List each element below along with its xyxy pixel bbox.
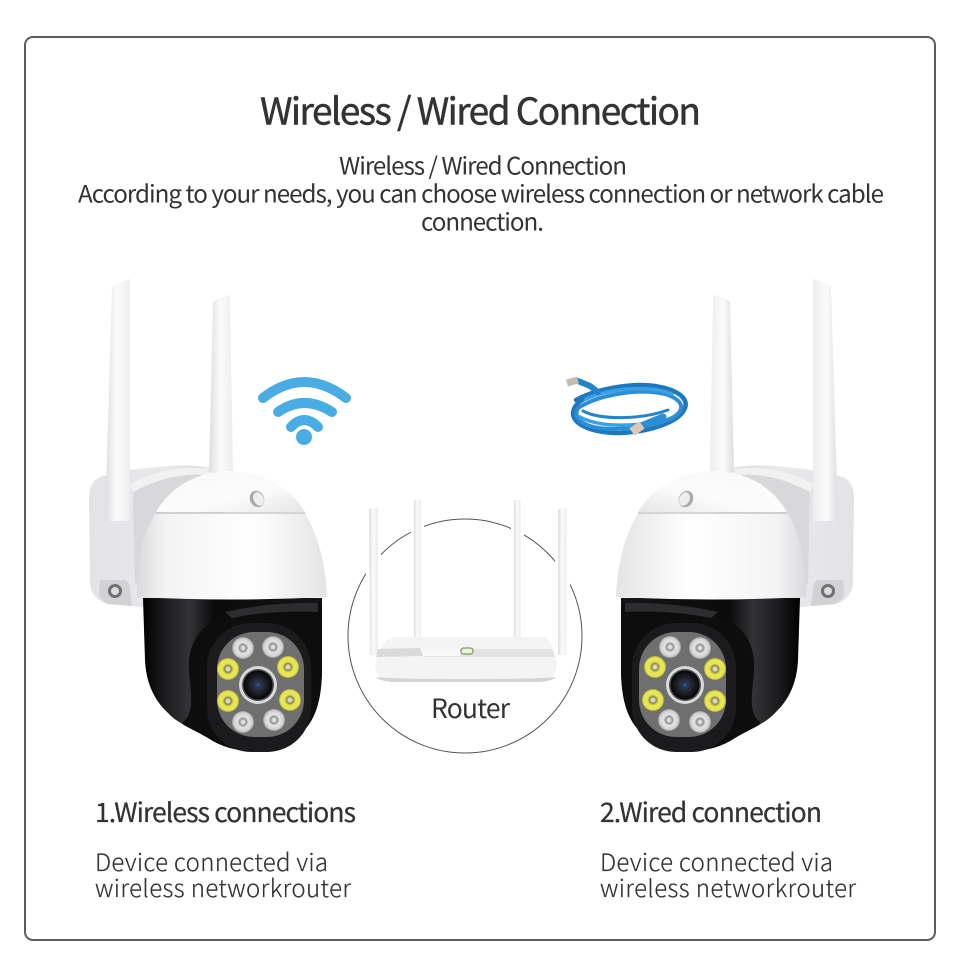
intro text bbox=[78, 146, 884, 238]
title: Wireless / Wired Connection bbox=[260, 82, 701, 136]
caption: wired connection: wireless networkrouter bbox=[600, 869, 856, 904]
icon: network cable bbox=[567, 380, 686, 433]
caption: wired connection bbox=[600, 791, 856, 904]
caption: wireless connections: wireless networkrouter bbox=[95, 869, 351, 904]
intro text: Wireless / Wired Connection bbox=[339, 146, 627, 182]
router label: Router bbox=[431, 687, 511, 726]
router circle bbox=[348, 519, 582, 753]
router bbox=[366, 500, 570, 682]
caption: wireless connections: 1.Wireless connections bbox=[95, 791, 356, 830]
camera: left bbox=[89, 279, 330, 770]
camera: right bbox=[613, 279, 854, 770]
caption: wireless connections bbox=[95, 791, 356, 904]
intro text: connection. bbox=[421, 202, 544, 238]
icon: wifi bbox=[263, 382, 346, 445]
caption: wireless connections: Device connected via bbox=[95, 843, 328, 878]
caption: wired connection: 2.Wired connection bbox=[600, 791, 822, 830]
intro text: According to your needs, you can choose wireless connection or network cable bbox=[78, 174, 884, 210]
caption: wired connection: Device connected via bbox=[600, 843, 833, 878]
